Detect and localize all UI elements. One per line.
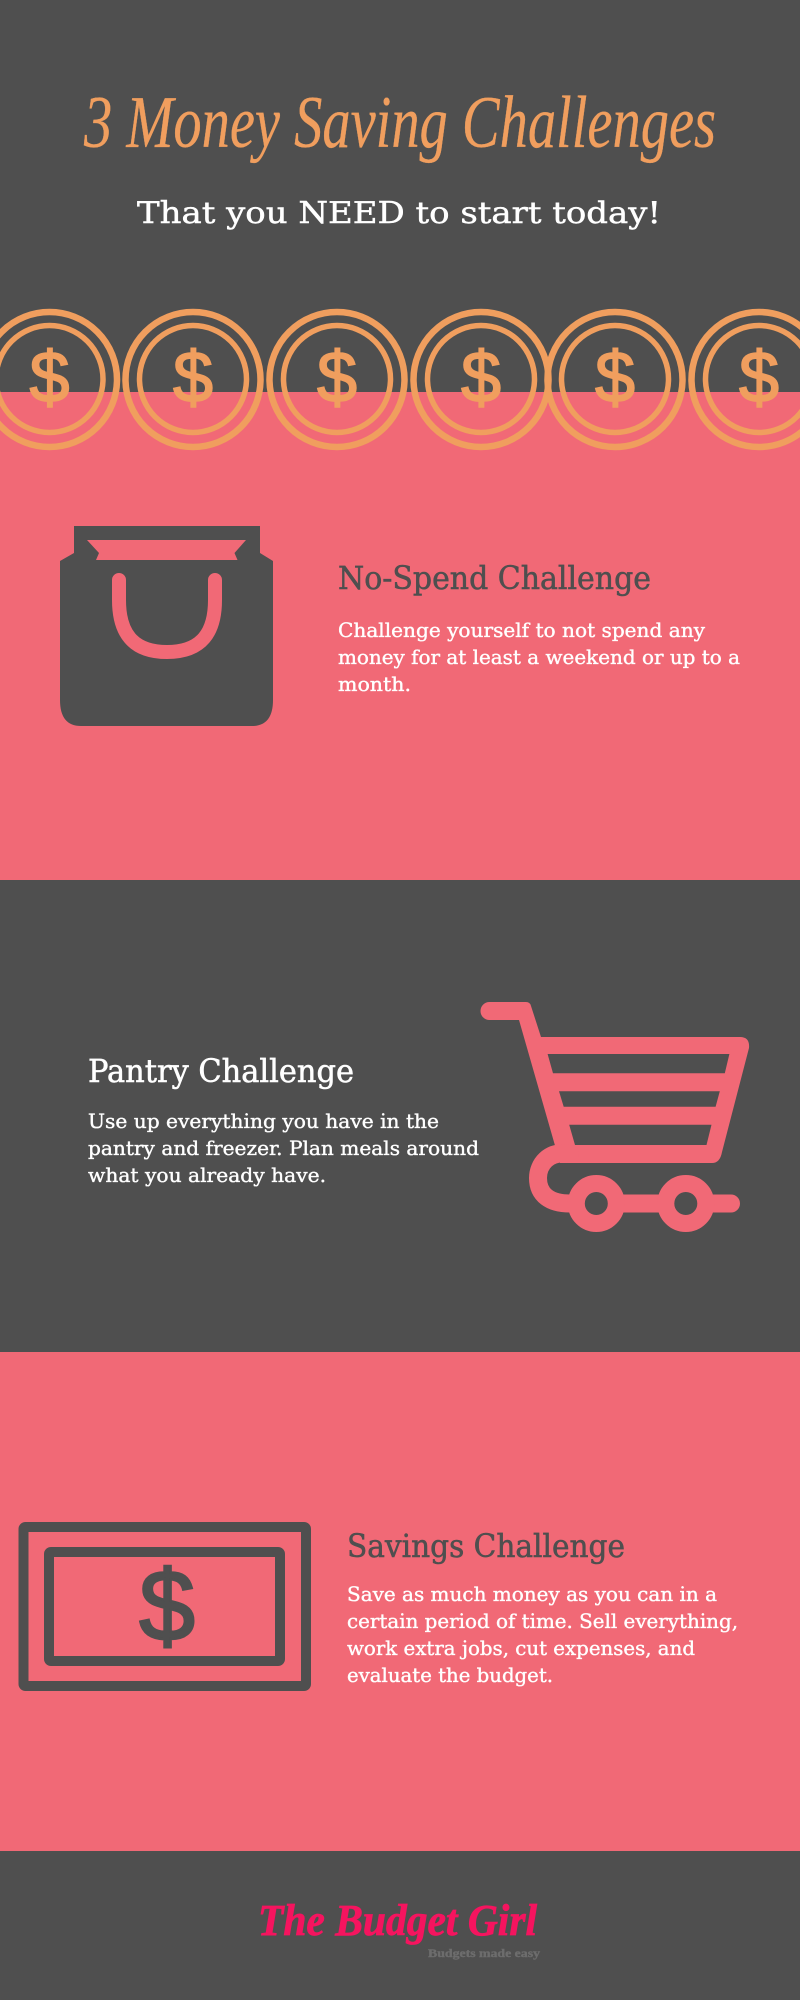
icon: coin 6: $ xyxy=(739,338,779,418)
icon: coin 3: $ xyxy=(317,338,357,418)
logo wordmark: The Budget Girl xyxy=(258,1896,538,1945)
heading: No-Spend Challenge xyxy=(338,559,651,597)
panel: footer background xyxy=(0,1851,800,2000)
body text xyxy=(338,618,740,696)
panel: savings background xyxy=(0,1352,800,1851)
icon: dollar bill: $ xyxy=(139,1550,195,1662)
panel: no-spend background xyxy=(0,392,800,880)
body text: work extra jobs, cut expenses, and xyxy=(347,1636,695,1660)
body text xyxy=(88,1109,479,1187)
body text: pantry and freezer. Plan meals around xyxy=(88,1136,479,1160)
logo: The Budget Girl xyxy=(258,1896,540,1960)
text block: no-spend challenge xyxy=(338,559,740,696)
body text: Save as much money as you can in a xyxy=(347,1582,717,1606)
icon: coin 6 xyxy=(692,312,800,447)
text block: pantry challenge xyxy=(88,1052,479,1187)
heading: Savings Challenge xyxy=(347,1527,625,1565)
body text: Use up everything you have in the xyxy=(88,1109,439,1133)
coin row xyxy=(0,312,800,447)
icon: coin 2 xyxy=(126,312,260,447)
icon: coin 1: $ xyxy=(29,338,70,418)
icon: coin 3 xyxy=(270,312,404,447)
subtitle: That you NEED to start today! xyxy=(137,196,661,231)
icon: coin 5: $ xyxy=(595,338,635,418)
icon: shopping bag xyxy=(60,526,273,726)
text block: savings challenge xyxy=(347,1527,738,1687)
panel: pantry background xyxy=(0,880,800,1352)
body text xyxy=(347,1582,738,1687)
body text: what you already have. xyxy=(88,1163,326,1187)
body text: month. xyxy=(338,672,411,696)
heading: Pantry Challenge xyxy=(88,1052,354,1090)
icon: coin 4: $ xyxy=(461,338,501,418)
icon: dollar bill xyxy=(24,1527,306,1686)
icon: shopping cart xyxy=(480,1002,749,1224)
body text: Challenge yourself to not spend any xyxy=(338,618,706,642)
panel: header background xyxy=(0,0,800,392)
logo tagline: Budgets made easy xyxy=(428,1946,540,1960)
icon: coin 5 xyxy=(548,312,682,447)
body text: evaluate the budget. xyxy=(347,1663,553,1687)
body text: certain period of time. Sell everything, xyxy=(347,1609,738,1633)
icon: coin 2: $ xyxy=(173,338,213,418)
icon: coin 4 xyxy=(414,312,548,447)
icon: coin 1 xyxy=(0,312,117,447)
body text: money for at least a weekend or up to a xyxy=(338,645,740,669)
